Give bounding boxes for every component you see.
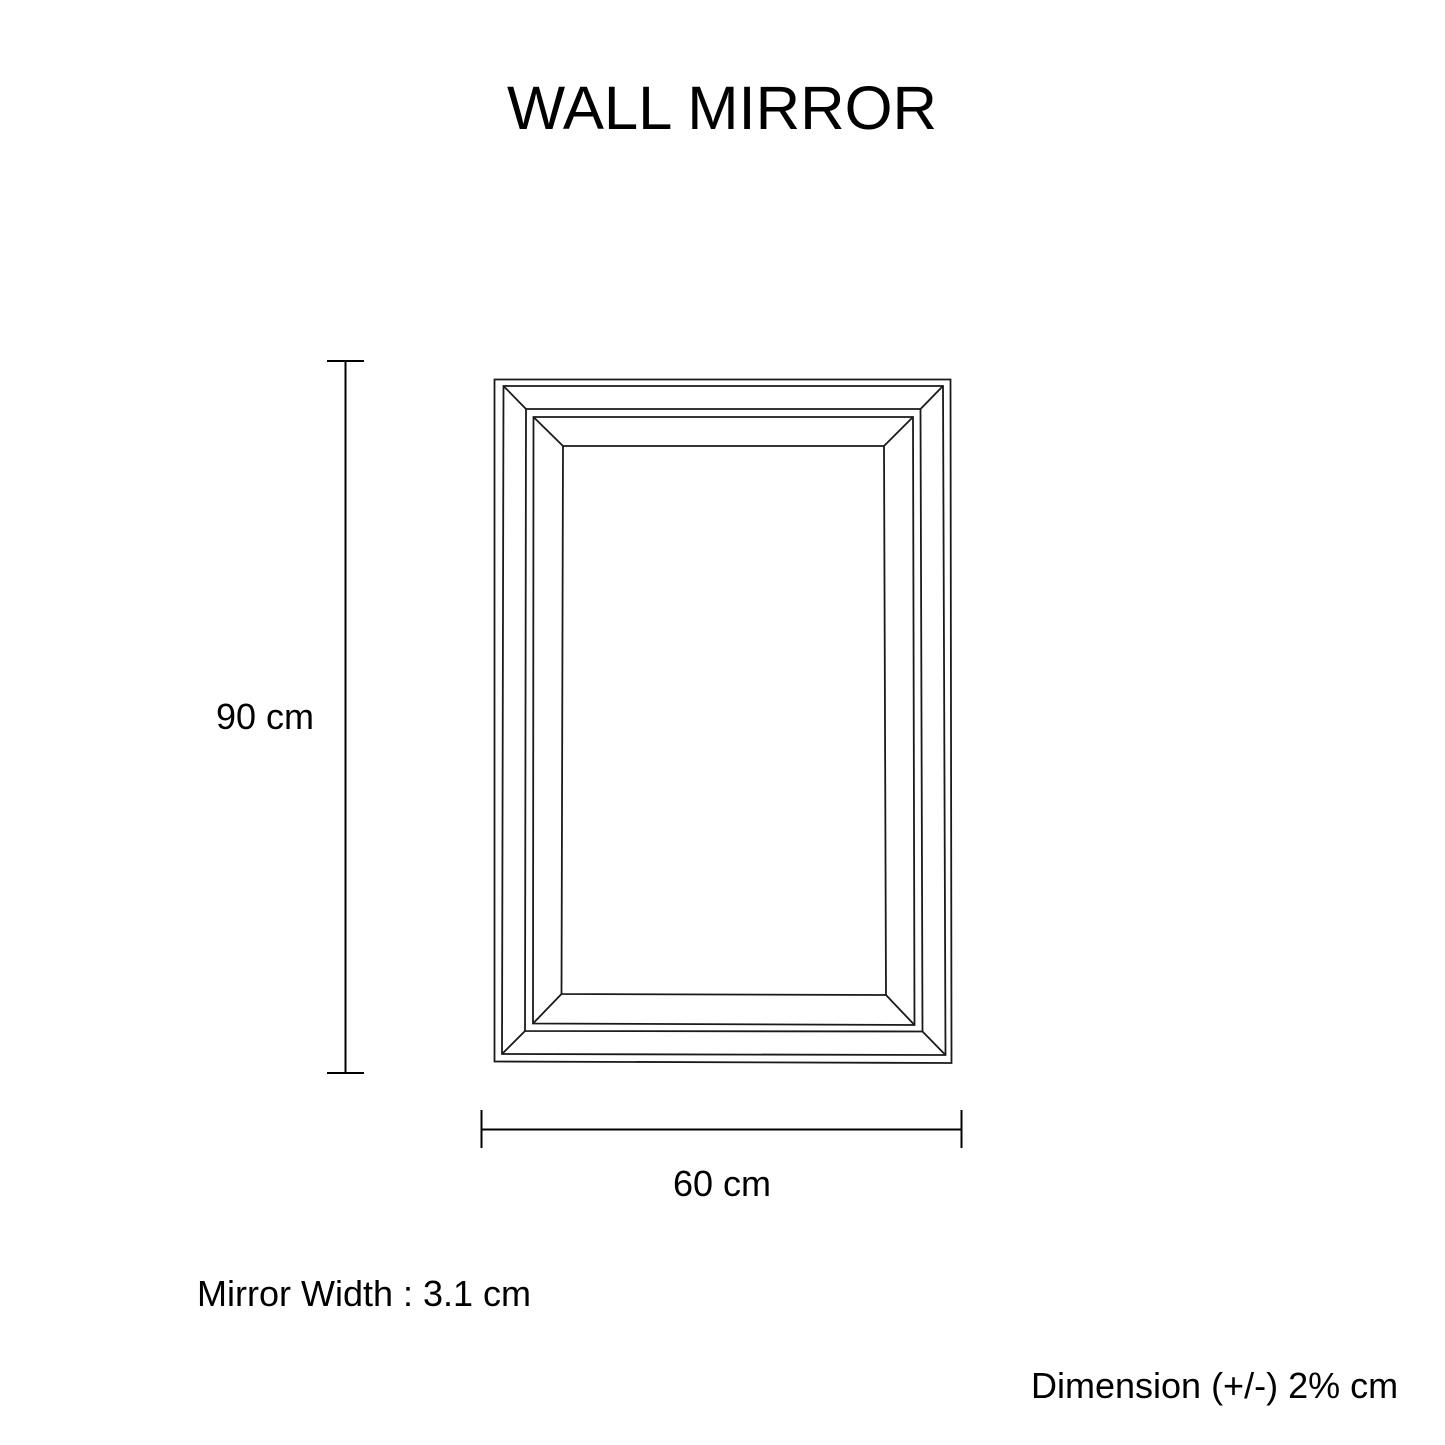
mirror frame drawing: [494, 380, 952, 1063]
frame mitre lines: [502, 386, 946, 1055]
title: WALL MIRROR: [507, 74, 937, 143]
mirror width note: Mirror Width : 3.1 cm: [197, 1273, 531, 1314]
frame outer edge: [494, 380, 952, 1063]
height label: 90 cm: [216, 696, 314, 737]
frame fourth edge: [533, 417, 914, 1025]
width dimension line: [482, 1110, 962, 1148]
mirror glass edge: [562, 446, 886, 995]
frame second edge: [502, 386, 946, 1055]
frame third edge: [525, 409, 922, 1032]
height dimension line: [327, 361, 364, 1073]
dimension tolerance note: Dimension (+/-) 2% cm: [1031, 1365, 1398, 1406]
width label: 60 cm: [673, 1163, 771, 1204]
